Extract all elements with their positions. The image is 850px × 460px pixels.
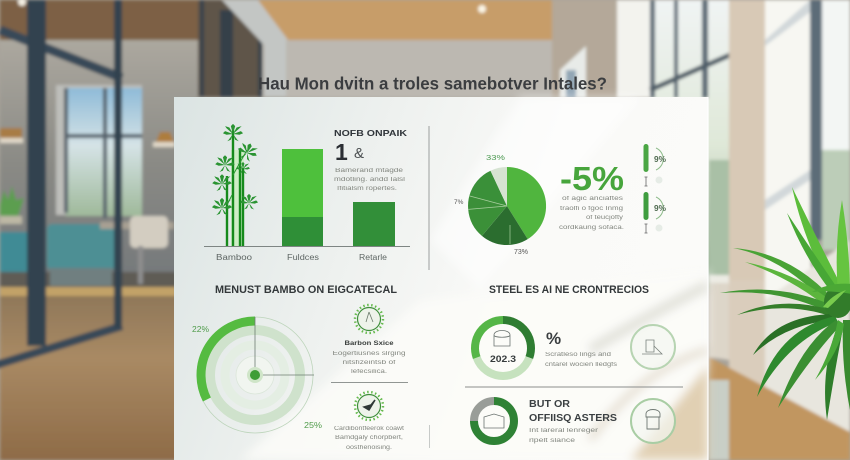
pie labels: 33% [486, 155, 505, 162]
text block: lower left [334, 426, 404, 451]
panel: infographic board [174, 97, 709, 460]
donut chart: lower [474, 401, 514, 441]
text block: Barbon Sxice [332, 340, 406, 375]
text block: BUT OR: Int lareral lenreger [529, 428, 598, 434]
heading: lower left: MENUST BAMBO ON EIGCATECAL [215, 284, 397, 296]
icon: bamboo [212, 124, 260, 246]
gauge 1: 9% [654, 154, 666, 164]
pie labels: 73% [514, 249, 528, 256]
text block: BUT OR: OFFIISQ ASTERS [529, 413, 617, 424]
text block: percent [545, 329, 617, 368]
radial gauge [192, 317, 322, 433]
callout: top-left stat: NOFB ONPAIK [334, 128, 408, 138]
callout: top-left stat: mdotling. andd Ialsl [334, 177, 405, 183]
text block: Barbon Sxice: nitsfizeintsb of [342, 360, 396, 366]
pie chart [454, 155, 546, 256]
icon: clock badge [355, 305, 383, 333]
text block: BUT OR: rlpelt slance [529, 438, 576, 444]
heading: lower right: STEEL ES AI NE CRONTRECIOS [489, 284, 649, 296]
axis labels: Bamboo [216, 253, 253, 262]
gauge labels: 22% [192, 325, 209, 334]
window frame lines [0, 30, 122, 78]
divider: vertical [428, 126, 430, 270]
axis labels [216, 253, 388, 262]
text block: BUT OR: BUT OR [529, 399, 571, 410]
donut chart: 202.3 [475, 320, 531, 376]
text block: BUT OR [529, 399, 617, 444]
text block: lower left: Bamdgaly chorpbert, [335, 435, 403, 441]
text block: lower left: Cardibontfeerok coawt [334, 426, 404, 432]
pie labels: 7% [454, 199, 464, 206]
bar chart: bamboo comparison [204, 124, 410, 262]
callout: top-left stat [334, 128, 408, 192]
callout: -5%: -5% [560, 160, 624, 197]
text block: percent: Scratleso lings and [545, 352, 611, 358]
text block: percent: % [546, 329, 561, 348]
callout: top-left stat: Bamerand mtagde [335, 168, 404, 174]
donut chart: 202.3: 202.3 [490, 354, 516, 365]
gauge labels [192, 325, 322, 430]
axis labels: Retarle [359, 253, 388, 262]
bar: Fuldces [282, 149, 323, 246]
icon: check badge [355, 392, 383, 420]
callout: top-left stat: 1 [335, 139, 348, 165]
callout: -5%: of teucjofty [586, 215, 623, 221]
callout: top-left stat: & [354, 145, 364, 162]
icon: ring 2 [631, 399, 675, 443]
text block: lower left: oosthenoising. [346, 445, 392, 451]
gauge 2: 9% [654, 203, 666, 213]
text block: Barbon Sxice: Eogertiusnes slrging [332, 351, 406, 357]
plant [720, 187, 850, 420]
callout: -5%: of agic anciaftes [562, 196, 623, 202]
callout: -5%: traolfi o fgoc Inmg [560, 206, 623, 212]
text block: Barbon Sxice: lefecsilica. [351, 369, 387, 375]
callout: -5% [559, 160, 624, 231]
callout: -5%: cordkaung sofaca. [559, 225, 624, 231]
icon: ring 1 [631, 325, 675, 369]
gauge labels: 25% [304, 421, 322, 430]
mini gauges [644, 144, 666, 233]
title: Hau Mon dvitn a troles samebotver Intales? [258, 74, 607, 94]
bar: Retarle [353, 202, 395, 246]
axis labels: Fuldces [287, 253, 319, 262]
callout: top-left stat: Ifitialsm ropertes. [337, 186, 397, 192]
text block: Barbon Sxice: Barbon Sxice [344, 340, 394, 347]
pie labels [454, 155, 528, 256]
text block: percent: cntarel wocien lledgfs [545, 362, 617, 368]
